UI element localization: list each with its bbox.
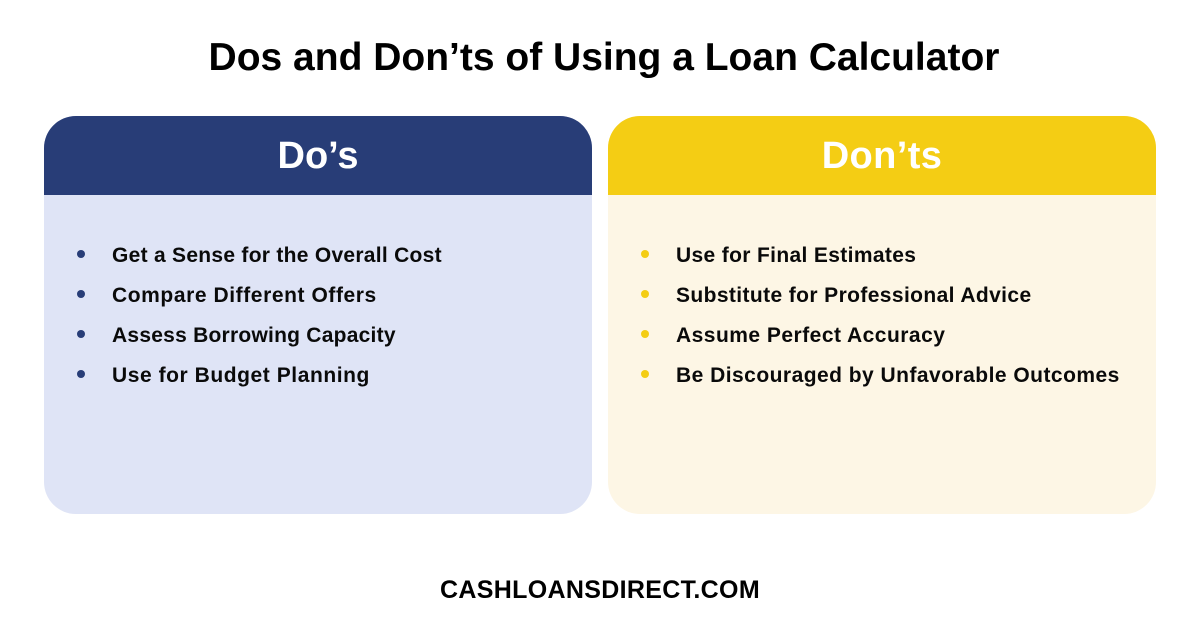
- text: overall cost: Get a Sense for the Overall Cost: [112, 244, 442, 267]
- footer brand: CASHLOANSDIRECT.COM: [440, 576, 760, 604]
- text: professional advice: Substitute for Professional Advice: [676, 284, 1032, 307]
- panel: do's: [44, 116, 592, 514]
- text: budget: Use for Budget Planning: [112, 364, 370, 387]
- bullet: offers: [77, 290, 85, 298]
- text: offers: Compare Different Offers: [112, 284, 377, 307]
- bullet: final estimates: [641, 250, 649, 258]
- heading: do's: [44, 116, 592, 195]
- panel: don'ts: [608, 116, 1156, 514]
- bullet: accuracy: [641, 330, 649, 338]
- title: Dos and Don’ts of Using a Loan Calculator: [209, 36, 999, 79]
- bullet: budget: [77, 370, 85, 378]
- heading: do's: Do’s: [278, 135, 358, 177]
- bullet: outcomes: [641, 370, 649, 378]
- text: capacity: Assess Borrowing Capacity: [112, 324, 396, 347]
- text: outcomes: Be Discouraged by Unfavorable Outcomes: [676, 364, 1120, 387]
- text: final estimates: Use for Final Estimates: [676, 244, 916, 267]
- heading: don'ts: [608, 116, 1156, 195]
- text: accuracy: Assume Perfect Accuracy: [676, 324, 945, 347]
- bullet: professional advice: [641, 290, 649, 298]
- bullet: overall cost: [77, 250, 85, 258]
- heading: don'ts: Don’ts: [822, 135, 942, 177]
- bullet: capacity: [77, 330, 85, 338]
